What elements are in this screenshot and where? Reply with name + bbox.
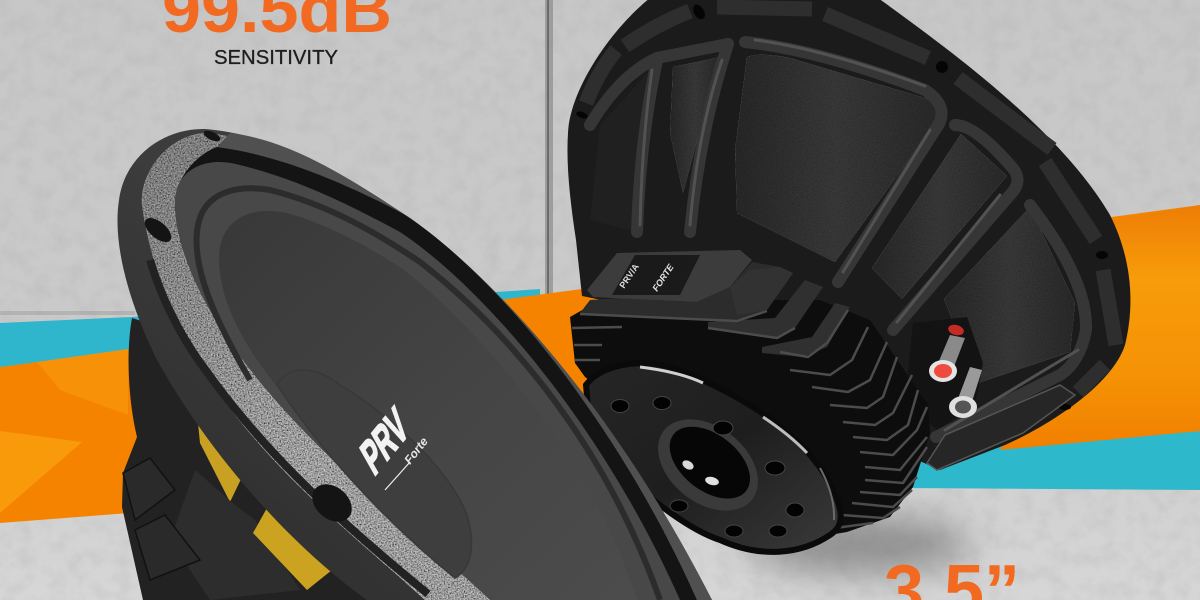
centre vent bbox=[640, 401, 776, 529]
teal band left bbox=[0, 289, 540, 372]
orange band bbox=[0, 205, 1200, 523]
front speaker bbox=[117, 129, 712, 600]
lead wire upper bbox=[198, 423, 242, 502]
surround bbox=[175, 162, 680, 600]
top label tray: PRV/A bbox=[617, 261, 641, 290]
magnet back plate bbox=[586, 363, 841, 552]
black gasket band bbox=[175, 147, 697, 600]
foam gasket bbox=[142, 133, 706, 600]
cone bbox=[219, 211, 637, 600]
cone logo: Forte bbox=[401, 434, 431, 467]
speaker terminals bbox=[929, 323, 982, 418]
cone back windows bbox=[670, 55, 1075, 383]
top label tray: FORTE bbox=[650, 262, 676, 293]
surround roll bbox=[197, 188, 660, 600]
basket spoke highlights bbox=[640, 40, 1078, 430]
basket arm bbox=[170, 470, 300, 600]
rear speaker rim bbox=[567, 0, 1130, 470]
shadow under rear speaker bbox=[750, 517, 970, 573]
rim mounting holes bbox=[575, 3, 1108, 410]
upper rim strip bbox=[217, 133, 712, 600]
dark gap in basket bbox=[162, 350, 270, 500]
basket bbox=[122, 318, 420, 600]
rear speaker bbox=[567, 0, 1130, 552]
stat: sensitivity label: SENSITIVITY bbox=[214, 47, 338, 69]
teal band right bbox=[850, 431, 1200, 490]
dust cap bbox=[277, 370, 472, 578]
rim segments bbox=[586, 7, 1116, 392]
lead wire lower bbox=[253, 508, 332, 590]
lower rim frame bbox=[927, 385, 1075, 470]
plate bolt holes bbox=[611, 396, 804, 537]
cone logo: PRV bbox=[354, 398, 415, 486]
top label tray bbox=[587, 250, 793, 315]
heatsink fins bbox=[572, 262, 927, 528]
terminal bracket bbox=[905, 317, 983, 430]
basket ribs bbox=[123, 458, 200, 580]
basket spokes bbox=[590, 42, 1086, 437]
heatsink body bbox=[570, 300, 930, 540]
dark foam edge bbox=[150, 260, 428, 594]
gasket notches bbox=[141, 129, 359, 529]
outer rim bbox=[117, 129, 712, 600]
left inner cone bbox=[590, 70, 650, 232]
